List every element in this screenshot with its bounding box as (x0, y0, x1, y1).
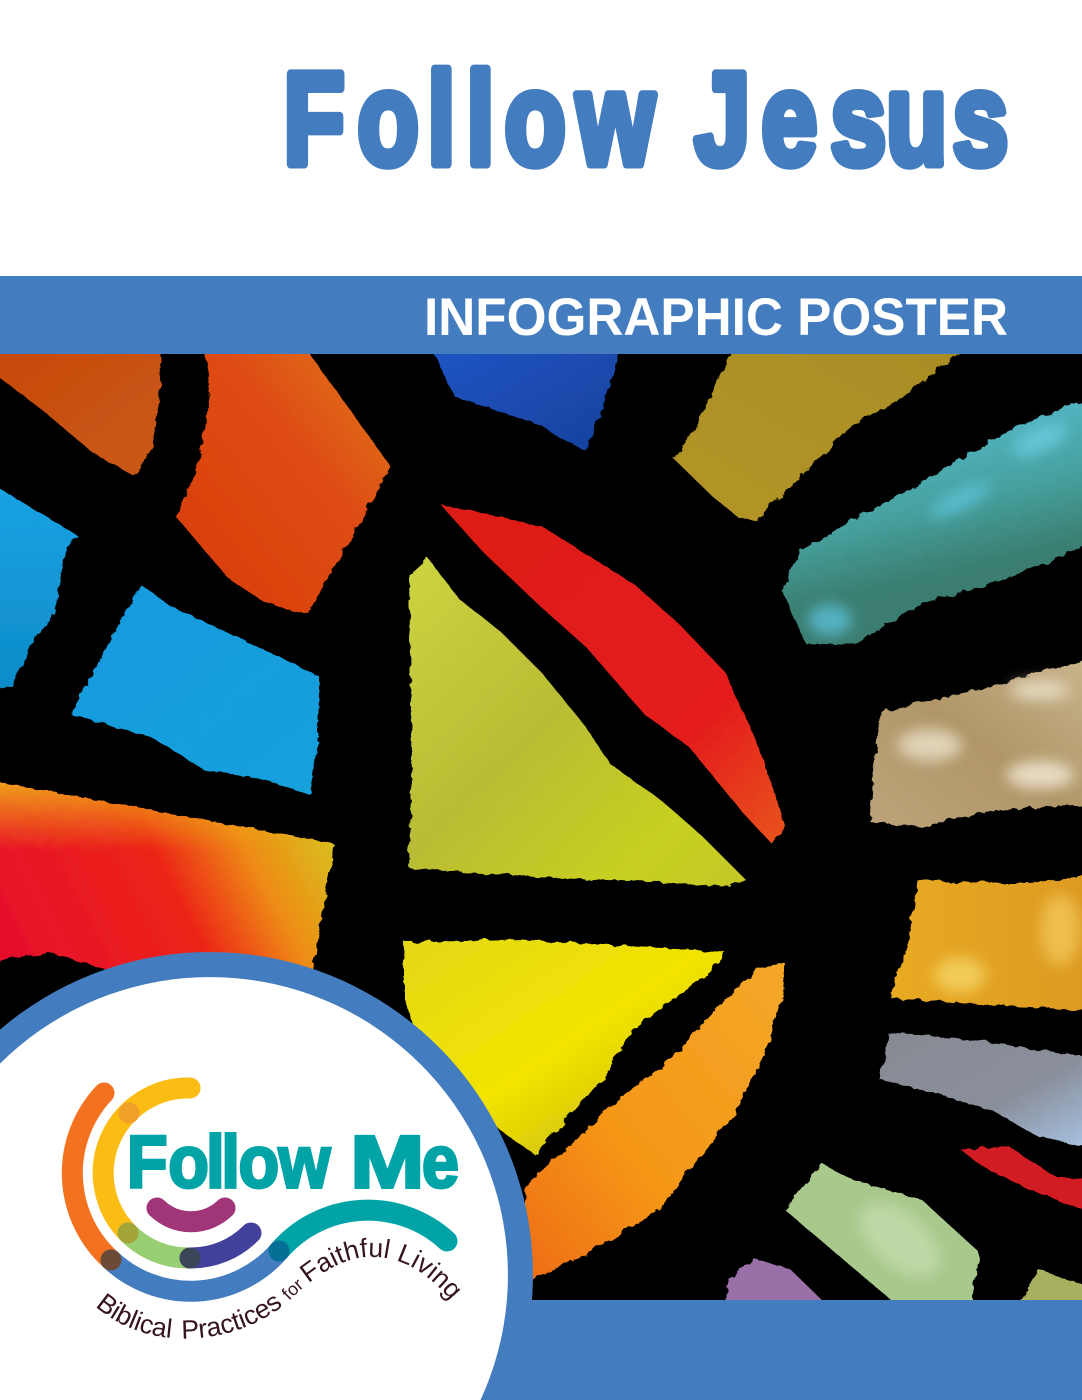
glass: olive gold (674, 346, 968, 521)
photo: stained glass window (0, 346, 1082, 1306)
glass: blue left edge (0, 484, 78, 688)
glass: blue middle (71, 585, 319, 795)
blue circle (0, 952, 533, 1400)
logo wordmark: e (422, 1120, 459, 1203)
arc: indigo (190, 1233, 251, 1258)
glass: blue top (430, 346, 621, 451)
arc: orange (72, 1093, 111, 1260)
glass: small red (961, 1147, 1082, 1212)
wave: teal (279, 1210, 447, 1251)
glass: gold right (891, 875, 1082, 1011)
logo wordmark: Follow (127, 1120, 330, 1203)
glass: purple (725, 1258, 822, 1300)
logo: Follow Me (62, 1078, 460, 1339)
white circle (0, 977, 508, 1400)
glass: orange top left (0, 346, 160, 475)
glass: green corner (1020, 1269, 1082, 1300)
glass: teal (782, 398, 1082, 644)
arc: green (128, 1233, 190, 1258)
arc: yellow (103, 1088, 190, 1233)
title: Follow Jesus (284, 45, 1008, 192)
glass: gray (880, 1032, 1082, 1148)
glass: red orange (177, 346, 391, 615)
glass: yellow green triangle (409, 558, 746, 887)
logo tagline: Biblical Practices for Faithful Living (96, 1238, 460, 1339)
glass: red crescent (440, 504, 786, 844)
subtitle: INFOGRAPHIC POSTER (424, 288, 1008, 347)
arc: blue (111, 1251, 279, 1291)
logo wordmark: M (350, 1121, 424, 1204)
bottom band (0, 1300, 1082, 1400)
overlap dots (100, 1102, 290, 1270)
logo wordmark (127, 1120, 459, 1204)
glass highlights (808, 416, 1080, 1291)
glass: yellow (404, 940, 726, 1155)
glass: light green (785, 1163, 980, 1306)
glass: red orange left (0, 781, 334, 980)
header band (0, 276, 1082, 354)
arc: purple (157, 1208, 225, 1222)
glass: orange crescent (525, 963, 785, 1283)
glass: tan (870, 659, 1082, 827)
